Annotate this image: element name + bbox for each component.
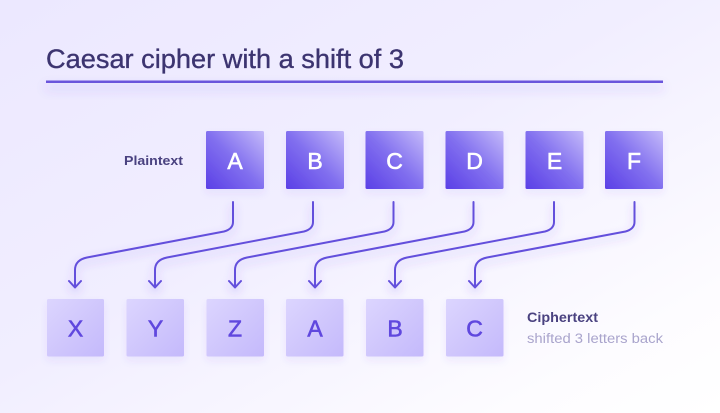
- ciphertext box Z: [206, 299, 264, 356]
- plaintext box D: D: [466, 148, 483, 174]
- plaintext box D: [446, 131, 504, 189]
- arrow A to X: [69, 202, 233, 288]
- title: Caesar cipher with a shift of 3: [46, 44, 404, 74]
- plaintext box A: [206, 131, 264, 189]
- arrows from plaintext to ciphertext: [69, 202, 634, 288]
- ciphertext box X: [47, 299, 104, 356]
- arrow B to Y: [149, 202, 313, 288]
- plaintext box E: [526, 131, 584, 189]
- label: plaintext: Plaintext: [124, 153, 184, 168]
- arrow D to A: [309, 202, 474, 288]
- arrow C to Z: [229, 202, 394, 288]
- ciphertext box B: B: [387, 316, 403, 342]
- plaintext box B: B: [307, 148, 323, 174]
- plaintext box F: [605, 131, 663, 189]
- ciphertext box X: X: [68, 316, 83, 342]
- arrow E to B: [389, 202, 554, 288]
- ciphertext box Y: [126, 299, 184, 356]
- plaintext box B: [286, 131, 344, 189]
- label: ciphertext: shifted 3 letters back: [527, 331, 663, 346]
- ciphertext box A: A: [307, 316, 323, 342]
- plaintext box A: A: [227, 148, 243, 174]
- plaintext box C: C: [386, 148, 403, 174]
- ciphertext box A: [286, 299, 344, 356]
- ciphertext row: [47, 299, 504, 356]
- ciphertext box Z: Z: [228, 316, 242, 342]
- plaintext box C: [366, 131, 424, 189]
- ciphertext box C: [446, 299, 504, 356]
- ciphertext box B: [366, 299, 424, 356]
- label: ciphertext: Ciphertext: [527, 310, 599, 325]
- label: ciphertext: [527, 310, 663, 346]
- arrow F to C: [469, 202, 634, 288]
- plaintext box F: F: [627, 148, 641, 174]
- plaintext box E: E: [547, 148, 562, 174]
- plaintext row: [206, 131, 663, 189]
- ciphertext box Y: Y: [148, 316, 163, 342]
- title underline: [46, 80, 663, 83]
- ciphertext box C: C: [466, 316, 483, 342]
